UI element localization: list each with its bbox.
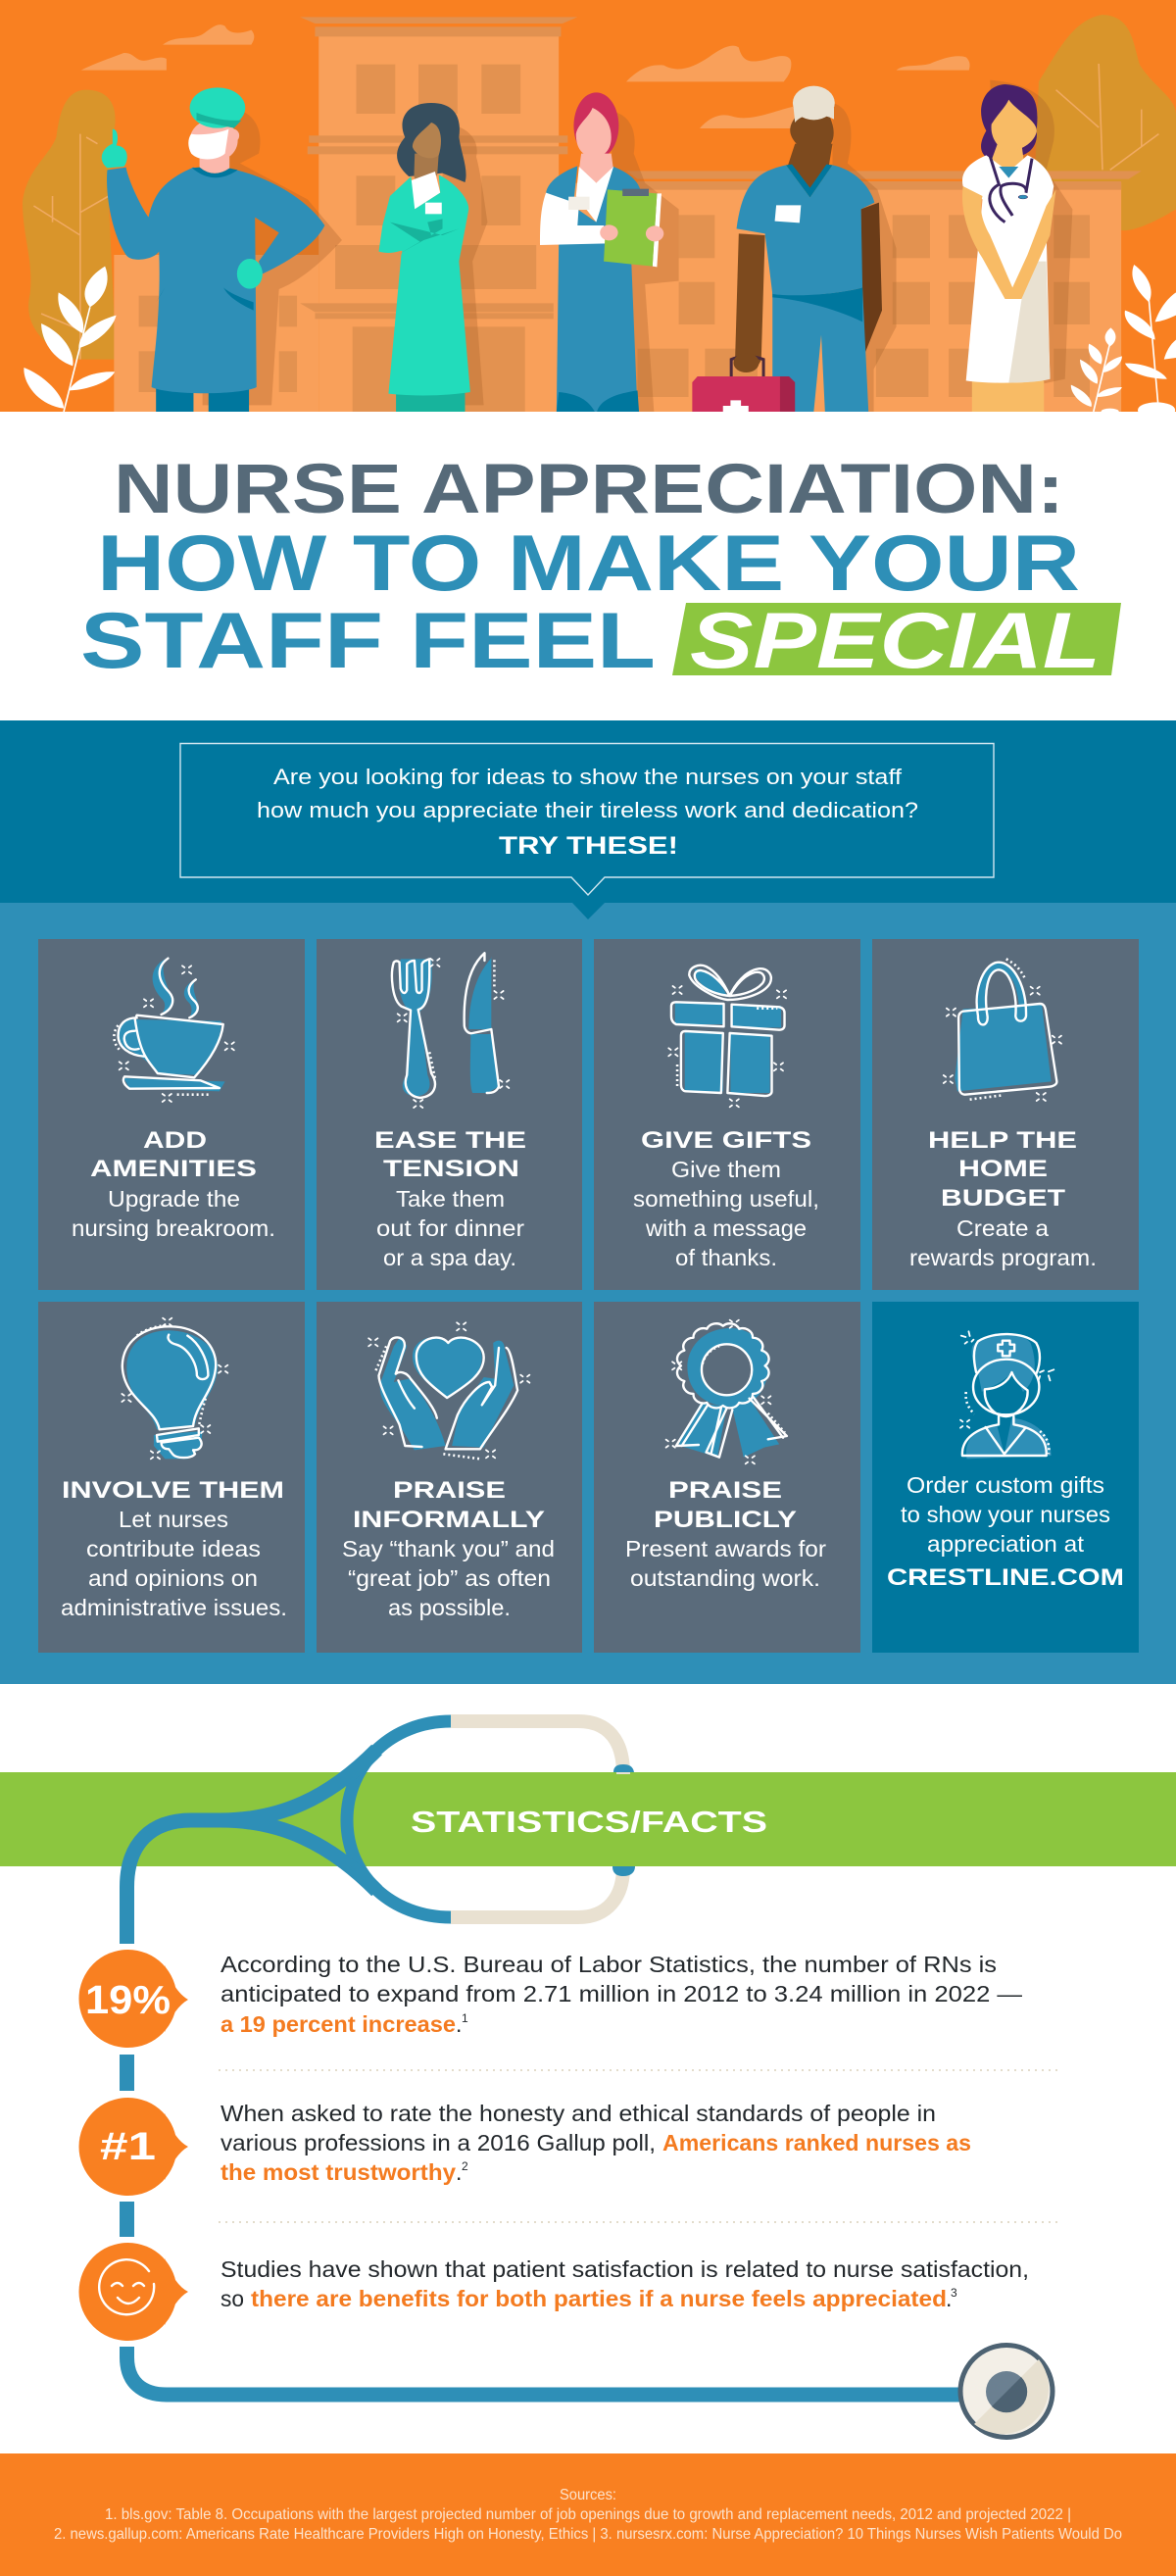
title line 3: STAFF FEEL: [80, 597, 656, 685]
card heading: [90, 1127, 257, 1182]
badge: smiley: [78, 2243, 188, 2341]
stethoscope lower tube: [127, 2347, 965, 2395]
card text: Present awards for: [625, 1536, 826, 1561]
card text: Create a: [956, 1215, 1049, 1241]
stethoscope chest piece: [960, 2345, 1053, 2437]
title line 2: HOW TO MAKE YOUR: [97, 520, 1080, 608]
callout: intro question: Are you looking for ideas to show the nurses on your staff: [273, 765, 903, 789]
panel: tips background: [0, 720, 1176, 1684]
nurse with stethoscope: [962, 84, 1056, 412]
card heading: ADD: [143, 1127, 207, 1154]
connecting tube segment: [120, 2055, 134, 2091]
stat text: anticipated to expand from 2.71 million in 2012 to 3.24 million in 2022 —: [220, 1981, 1022, 2006]
card text: [376, 1186, 524, 1270]
card text: “great job” as often: [348, 1565, 551, 1591]
title line 1: NURSE APPRECIATION:: [114, 451, 1064, 528]
card heading: [374, 1127, 526, 1182]
panel: praise publicly: [594, 1302, 860, 1653]
stat text: When asked to rate the honesty and ethical standards of people in: [220, 2101, 936, 2126]
stat text: .: [456, 2159, 462, 2185]
card text: outstanding work.: [630, 1565, 820, 1591]
stat text: so: [220, 2286, 244, 2311]
card text: to show your nurses: [901, 1502, 1110, 1527]
card heading: INFORMALLY: [353, 1507, 545, 1533]
stat text: .: [456, 2011, 462, 2037]
badge: 19%: [78, 1950, 188, 2048]
icon: hands holding heart: [368, 1322, 529, 1459]
title: [80, 451, 1121, 685]
card text: administrative issues.: [61, 1595, 287, 1620]
stat text: there are benefits for both parties if a nurse feels appreciated: [251, 2286, 947, 2311]
stethoscope tube: [127, 1721, 635, 1944]
card heading: TENSION: [383, 1156, 519, 1182]
band: statistics and facts: STATISTICS/FACTS: [411, 1805, 767, 1839]
card text: Order custom gifts: [906, 1472, 1104, 1498]
card text: contribute ideas: [86, 1536, 261, 1561]
website link: CRESTLINE.COM: [887, 1564, 1124, 1591]
badge: #1: [78, 2098, 188, 2196]
stat text: Americans ranked nurses as: [662, 2130, 971, 2155]
card text: [909, 1215, 1097, 1270]
stat text: According to the U.S. Bureau of Labor Statistics, the number of RNs is: [220, 1952, 997, 1977]
card text: Upgrade the: [108, 1186, 240, 1212]
card text: or a spa day.: [383, 1245, 516, 1270]
stat: satisfaction: [78, 2243, 1029, 2341]
card text: rewards program.: [909, 1245, 1097, 1270]
card heading: INVOLVE THEM: [62, 1477, 284, 1504]
surgeon figure: [102, 87, 324, 412]
card heading: GIVE GIFTS: [641, 1127, 811, 1154]
icon: nurse with cap: [960, 1331, 1054, 1459]
card text: [72, 1186, 275, 1241]
footer: sources: 1. bls.gov: Table 8. Occupations with the largest projected number of job openings due to growth and replacement needs, 2012 and projected 2022 |: [105, 2506, 1071, 2523]
divider: [219, 2069, 1057, 2071]
stat text: the most trustworthy: [220, 2159, 456, 2185]
callout: intro question: [180, 743, 994, 895]
card heading: HOME: [958, 1156, 1048, 1182]
card text: Say “thank you” and: [342, 1536, 555, 1561]
stat: 19 percent: [78, 1950, 1022, 2048]
panel: order custom gifts: [872, 1302, 1139, 1653]
divider: [219, 2221, 1057, 2223]
figure shadows: [203, 80, 1072, 412]
nurse with clipboard: [540, 92, 663, 412]
card heading: EASE THE: [374, 1127, 526, 1154]
card text: Take them: [396, 1186, 505, 1212]
stat text: 1: [462, 2011, 468, 2025]
card text: [625, 1536, 826, 1591]
card heading: BUDGET: [941, 1185, 1065, 1212]
stat text: [220, 2101, 971, 2185]
plants: [24, 265, 1176, 418]
card text: Give them: [671, 1157, 781, 1182]
hero illustration: nurses in front of hospital: [0, 0, 1176, 418]
card text: [61, 1507, 287, 1620]
panel: praise informally: [317, 1302, 582, 1653]
callout: intro question: TRY THESE!: [499, 832, 678, 860]
stat text: [220, 1952, 1022, 2037]
nurse in mint gown: [378, 103, 470, 412]
card text: with a message: [645, 1215, 807, 1241]
badge: 19%: 19%: [85, 1977, 171, 2022]
card text: Let nurses: [119, 1507, 228, 1532]
card heading: PUBLICLY: [654, 1507, 797, 1533]
card text: [901, 1472, 1110, 1557]
stat text: .: [946, 2286, 952, 2311]
badge: #1: #1: [100, 2125, 156, 2168]
panel: help the home budget: [872, 939, 1139, 1290]
stat text: Studies have shown that patient satisfaction is related to nurse satisfaction,: [220, 2256, 1029, 2282]
card text: nursing breakroom.: [72, 1215, 275, 1241]
icon: coffee cup: [114, 959, 234, 1102]
stat text: a 19 percent increase: [220, 2011, 456, 2037]
background trees: [23, 15, 1176, 360]
connecting tube segment: [120, 2202, 134, 2237]
stat text: 2: [462, 2159, 468, 2173]
nurse with medical bag: [692, 86, 882, 412]
footer: sources: 2. news.gallup.com: Americans Rate Healthcare Providers High on Honesty, Ethics | 3. nursesrx.com: Nurse Appreciation? 10 Things Nurses Wish Patients Would Do: [54, 2526, 1122, 2543]
panel: involve them: [38, 1302, 305, 1653]
right hospital wing: [559, 171, 1142, 412]
card heading: PRAISE: [393, 1477, 506, 1504]
card heading: AMENITIES: [90, 1156, 257, 1182]
card heading: PRAISE: [668, 1477, 782, 1504]
card text: something useful,: [633, 1186, 819, 1212]
card heading: HELP THE: [928, 1127, 1077, 1154]
card text: out for dinner: [376, 1215, 524, 1241]
icon: light bulb: [122, 1318, 227, 1459]
stat text: [220, 2256, 1029, 2311]
panel: ease the tension: [317, 939, 582, 1290]
card text: as possible.: [388, 1595, 511, 1620]
card text: [342, 1536, 555, 1620]
icon: gift box: [668, 966, 786, 1107]
card heading: [353, 1477, 545, 1533]
card heading: [928, 1127, 1077, 1212]
highlight: special: SPECIAL: [690, 597, 1101, 685]
footer: sources: Sources:: [560, 2487, 616, 2503]
band: statistics and facts: [0, 1772, 1176, 1866]
panel: add amenities: [38, 939, 305, 1290]
stat text: various professions in a 2016 Gallup poll,: [220, 2130, 656, 2155]
icon: fork and knife: [392, 953, 509, 1108]
callout: intro question: how much you appreciate their tireless work and dedication?: [257, 798, 918, 822]
icon: award ribbon: [666, 1320, 787, 1463]
panel: give gifts: [594, 939, 860, 1290]
card heading: [654, 1477, 797, 1533]
stat: number one: [78, 2098, 971, 2196]
footer: sources: [0, 2453, 1176, 2576]
icon: smiley face: [99, 2259, 154, 2314]
card text: [633, 1157, 819, 1270]
card text: and opinions on: [88, 1565, 258, 1591]
hospital tower: [300, 17, 577, 412]
card text: of thanks.: [675, 1245, 777, 1270]
left hospital wing: [114, 255, 318, 412]
stat text: 3: [951, 2286, 957, 2300]
clouds: [81, 25, 970, 128]
icon: shopping bag: [944, 959, 1061, 1101]
card text: appreciation at: [927, 1531, 1085, 1557]
